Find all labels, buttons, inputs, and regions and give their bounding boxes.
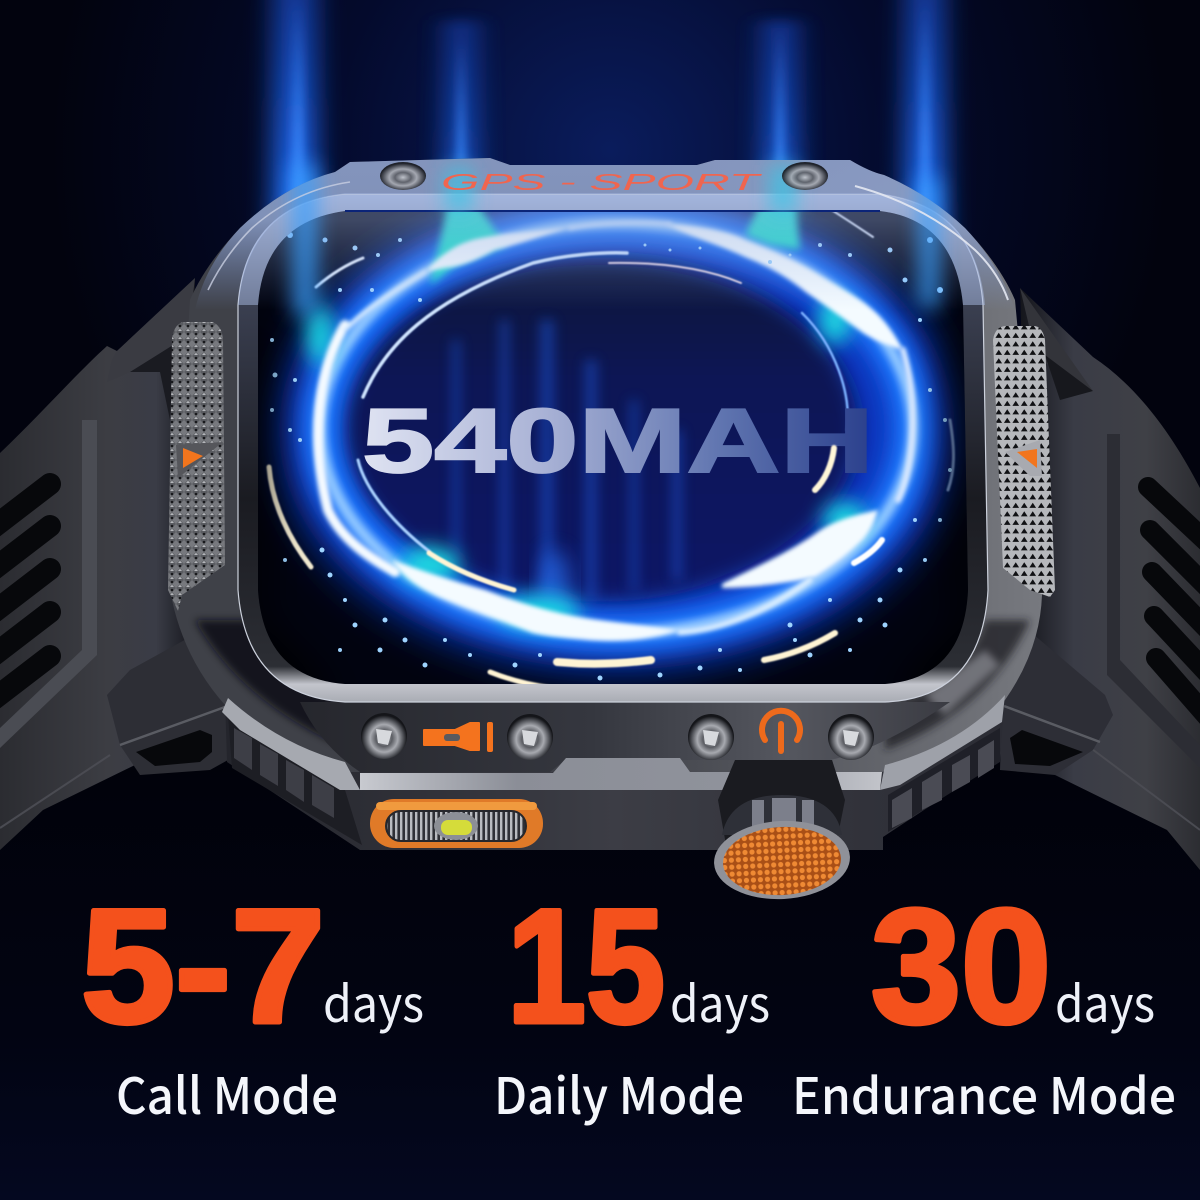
- crown silver rim: [712, 817, 852, 903]
- right strap upper shoulder: [1020, 288, 1093, 391]
- ring body: [321, 223, 913, 633]
- silver lower step: [360, 758, 882, 790]
- battery capacity text: 540MAH: [362, 391, 874, 492]
- outer blue haze: [279, 190, 955, 670]
- icon: power button: [762, 711, 800, 751]
- stat: 30 days: 30: [871, 876, 1051, 1057]
- ring glow: [321, 223, 913, 633]
- left strap slots: [0, 484, 50, 702]
- screw plate: [300, 702, 950, 772]
- right knurled grip: [993, 326, 1055, 597]
- flashlight LED window: [370, 799, 543, 848]
- lower background: [0, 640, 1200, 1200]
- left orange marker: [183, 448, 203, 468]
- screen: [258, 211, 968, 684]
- top screws: [380, 162, 828, 190]
- label: Daily Mode: Daily Mode: [494, 1057, 744, 1129]
- left knurled grip: [168, 322, 225, 611]
- core streaks: [452, 320, 682, 600]
- screen corner shade: [258, 336, 966, 684]
- ring core dark: [342, 258, 858, 602]
- screen top glass haze: [259, 211, 962, 302]
- crown orange disc: [721, 824, 843, 898]
- particles: [270, 232, 952, 680]
- bright ring crescents: [392, 224, 903, 641]
- inner screen frame: [238, 194, 988, 702]
- stat: 15 days: 15: [507, 876, 665, 1057]
- right lug: [1000, 634, 1113, 775]
- left strap groove: [0, 420, 97, 748]
- left silver arc: [222, 698, 360, 790]
- right strap groove: [1107, 434, 1200, 768]
- GPS-SPORT engraved text: GPS - SPORT: [441, 169, 763, 195]
- glass glare over top of bezel: [195, 158, 1015, 315]
- left lug: [107, 637, 228, 775]
- right silver arc: [880, 695, 1005, 790]
- bottom screws: [361, 713, 874, 760]
- ring bright lines: [318, 223, 913, 632]
- stat: 5-7 days: 5-7: [81, 876, 325, 1057]
- stat: 15 days: days: [670, 965, 770, 1037]
- right strap slots: [1148, 487, 1200, 720]
- left strap upper shoulder: [107, 278, 195, 382]
- stat: 30 days: [871, 876, 1155, 1057]
- right strap: [1020, 288, 1200, 870]
- watch bezel: [172, 158, 1042, 790]
- stat: 30 days: days: [1055, 965, 1155, 1037]
- icon: flashlight: [424, 722, 493, 752]
- digital crown: [712, 760, 852, 903]
- brushed corner dark left: [195, 620, 345, 745]
- brushed corner right: [885, 620, 1030, 750]
- energy light beams: [273, 0, 945, 320]
- right orange marker: [1017, 449, 1037, 468]
- stat: 5-7 days: [81, 876, 424, 1057]
- label: Endurance Mode: Endurance Mode: [792, 1057, 1176, 1129]
- lower case band: [225, 695, 1005, 850]
- label: Call Mode: Call Mode: [116, 1057, 338, 1129]
- stat: 15 days: [507, 876, 770, 1057]
- stat: 5-7 days: days: [323, 965, 424, 1037]
- left strap: [0, 278, 195, 850]
- core lower flare: [539, 550, 571, 630]
- teal flares: [430, 200, 800, 285]
- crescent over text end: [815, 448, 834, 490]
- thin accent arcs: [269, 200, 954, 688]
